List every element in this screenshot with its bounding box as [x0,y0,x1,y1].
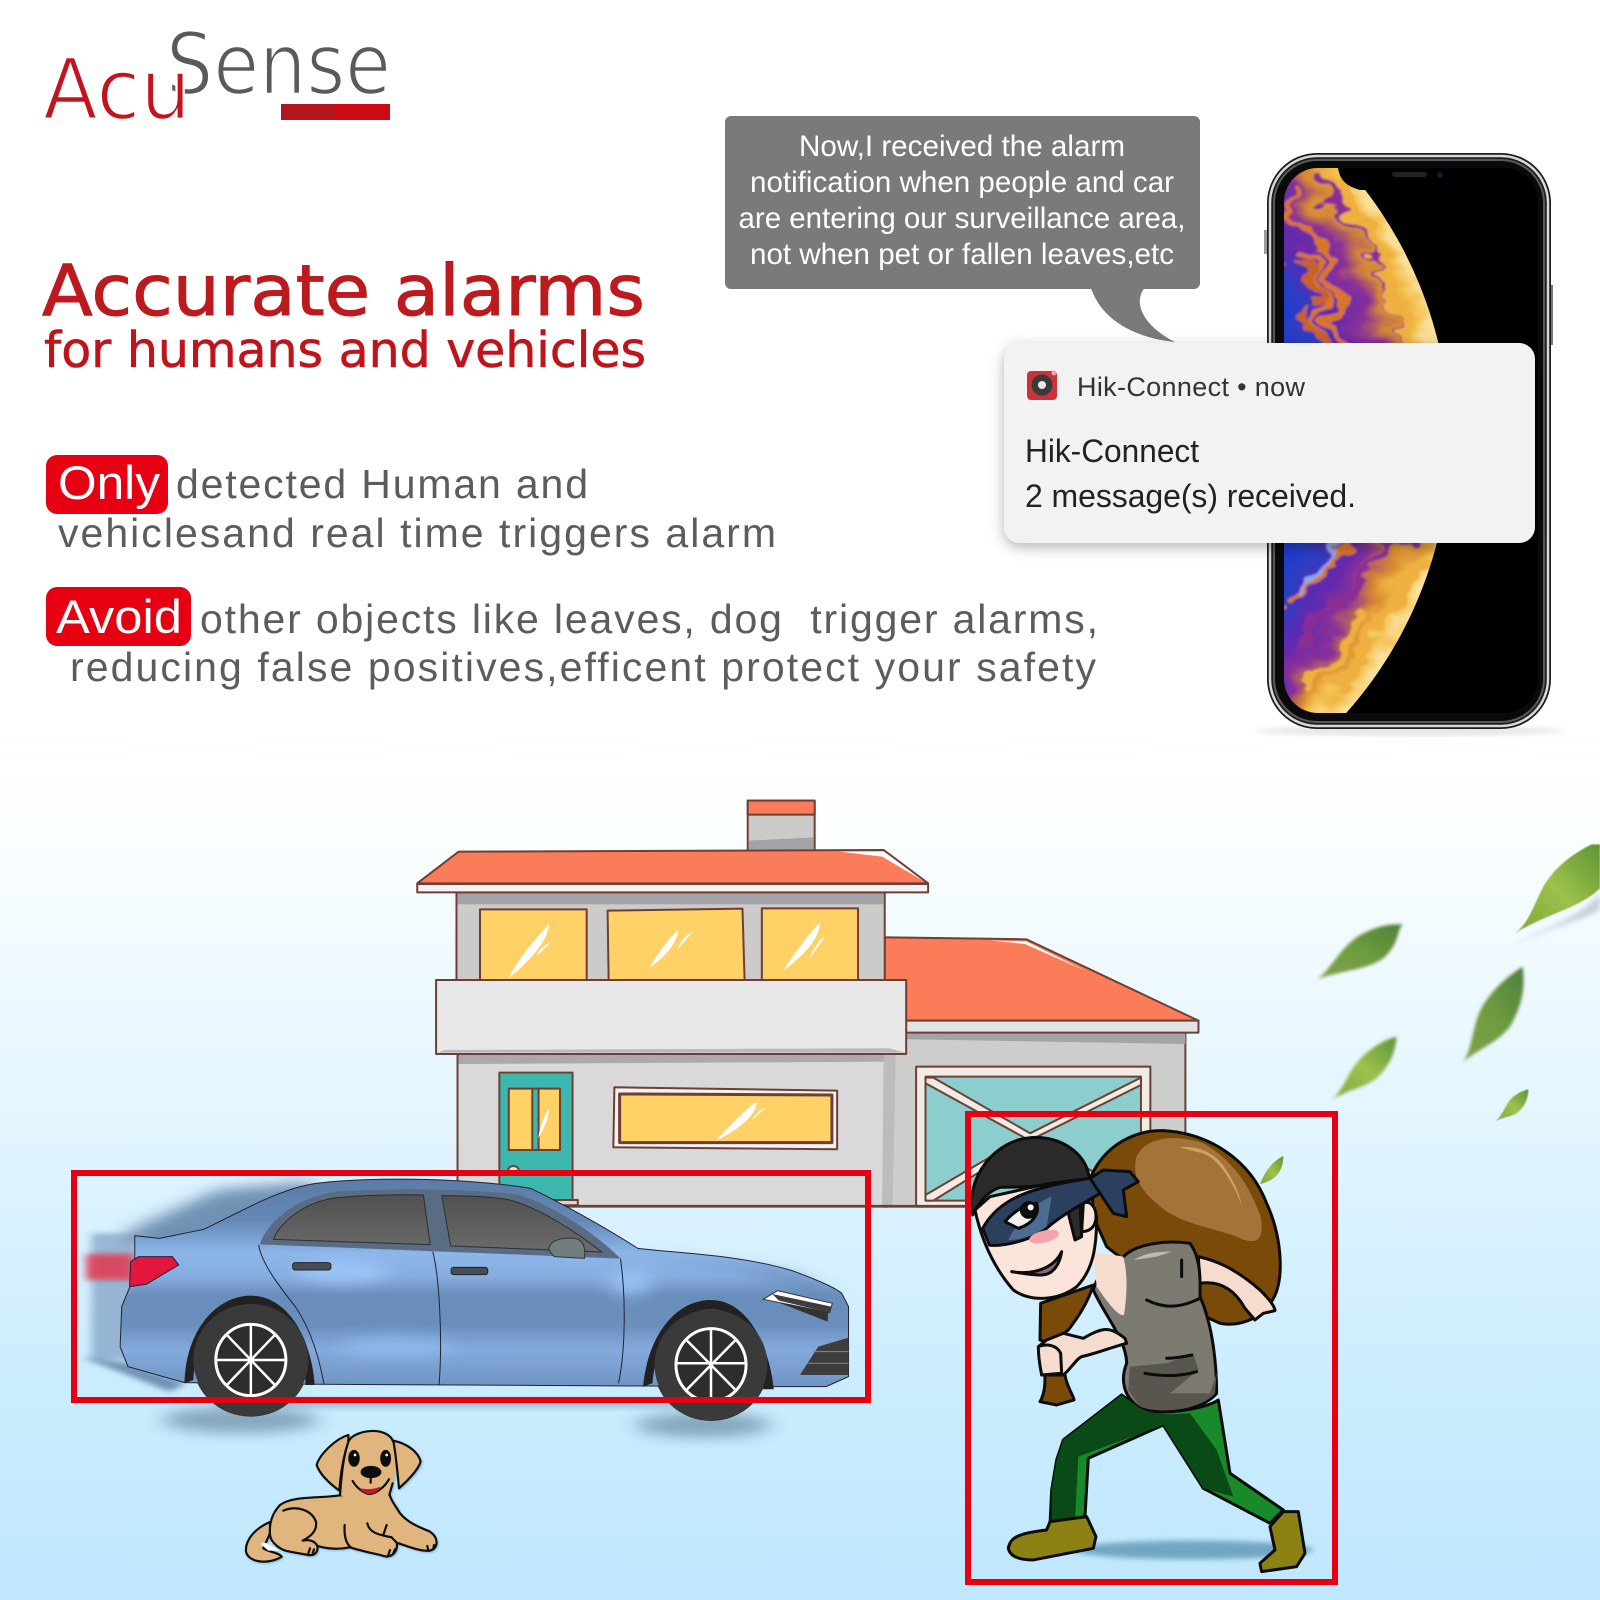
body highlights [295,1253,834,1357]
taillight [130,1257,179,1287]
ear [1082,1202,1096,1232]
text block: avoid [46,587,1098,690]
thief [971,1131,1313,1572]
notification title: Hik-Connect [1025,433,1199,469]
heading: Accurate alarms: Accurate alarms [42,250,645,332]
text block: only: Only [58,456,161,509]
hair [971,1137,1089,1240]
shirt [1093,1242,1217,1412]
roof [417,850,928,892]
sack neck [1040,1285,1093,1405]
lower window [613,1087,837,1149]
dog tail [246,1522,282,1562]
text block: avoid: other objects like leaves, dog trigger alarms, [200,596,1098,642]
notification header: Hik-Connect • now [1077,372,1306,402]
front arm [1038,1330,1127,1375]
dog head [317,1431,421,1498]
windows [273,1195,602,1252]
blindfold [983,1178,1103,1245]
door lines [259,1245,624,1385]
leaf 1 [1515,844,1600,933]
car body [120,1179,849,1387]
logo: AcuSense: Sense [166,15,391,115]
icon: hik-connect app [1027,370,1057,400]
speech bubble: not when pet or fallen leaves,etc [750,238,1174,271]
headlight [763,1291,832,1322]
neck [1093,1252,1127,1315]
rear wheel [184,1296,315,1416]
car motion blur [81,1182,321,1392]
detection box: car [74,1173,868,1400]
phone screen [1284,168,1538,713]
upper wall [456,893,885,981]
leaf shadow [1515,893,1600,945]
window frame [260,1189,621,1259]
leaf 2 [1317,924,1403,979]
dog body [270,1493,437,1557]
detection box: thief [968,1114,1335,1582]
leaf 5 [1495,1089,1528,1122]
grille [800,1338,849,1375]
door [494,1073,578,1205]
chimney [748,801,815,851]
right roof [885,937,1198,1033]
leaf 4 [1332,1037,1397,1100]
car [81,1179,849,1438]
thief shadow [1073,1541,1313,1559]
car shadow [162,1398,771,1438]
dog [246,1431,437,1562]
speech bubble: notification when people and car [750,166,1174,199]
speech bubble [725,116,1200,342]
leaves [1317,844,1600,1122]
text block: avoid: reducing false positives,efficent protect your safety [70,644,1096,690]
planet wallpaper [1284,168,1438,713]
speech bubble: Now,I received the alarm [799,130,1125,163]
upper windows [480,908,858,980]
mouth [1012,1252,1062,1275]
knot [1090,1170,1138,1217]
text block: only [46,455,776,556]
head [971,1137,1138,1298]
logo: AcuSense [43,15,391,140]
front wheel [643,1300,774,1420]
door handles [293,1263,488,1275]
house illustration [417,801,1198,1207]
dog limbs [283,1508,434,1555]
notification card [1004,343,1535,543]
tires [192,1303,769,1421]
pants [1050,1395,1283,1525]
speech bubble: are entering our surveillance area, [738,202,1186,235]
sack [1092,1131,1280,1324]
notification body: 2 message(s) received. [1025,478,1356,514]
mirror [549,1238,585,1258]
fist [1038,1345,1062,1375]
subheading: for humans and vehicles: for humans and vehicles [44,322,646,379]
right wing wall [884,1032,1185,1207]
text block: only: detected Human and [176,461,588,507]
phone [1260,153,1560,737]
leaf 3 [1463,967,1524,1062]
shoes [1008,1512,1305,1572]
speaker and camera [1392,172,1443,178]
text block: only: vehiclesand real time triggers alarm [58,510,776,556]
text block: avoid: Avoid [56,590,182,643]
balcony [436,980,906,1054]
garage door [916,1067,1150,1207]
back arm [1198,1257,1275,1320]
eye [1005,1203,1037,1228]
logo: AcuSense: Acu [43,41,191,140]
blush [1028,1227,1060,1246]
lower wall [458,1054,896,1207]
small leaf [1260,1156,1283,1184]
